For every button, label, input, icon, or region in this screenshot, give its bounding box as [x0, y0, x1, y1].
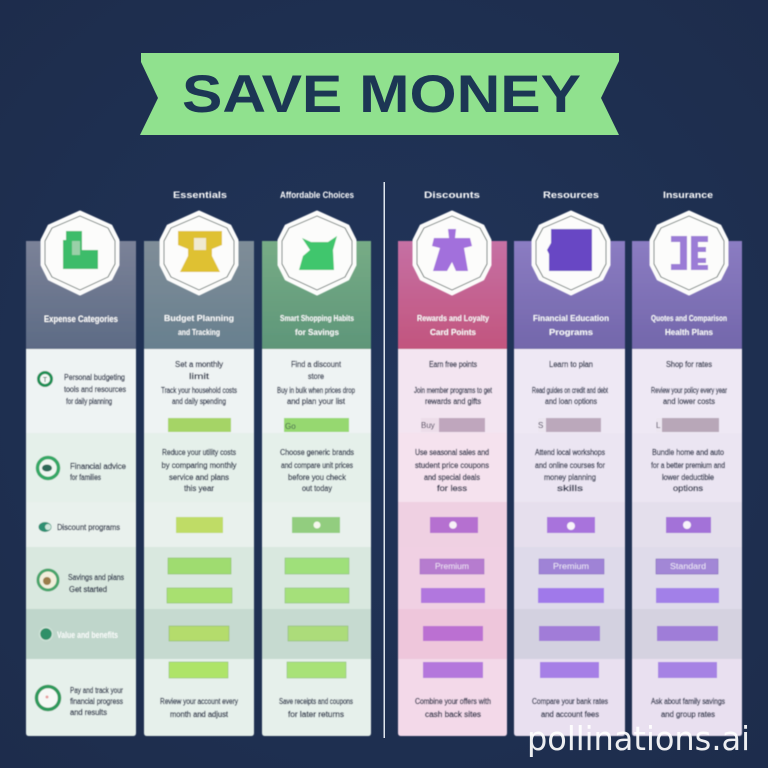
column 3 rows	[262, 349, 371, 736]
column 2 header label	[164, 314, 234, 337]
column 2 row 2 text: service and plans	[169, 473, 229, 482]
column 3 row 1 text: Buy in bulk when prices drop	[277, 386, 355, 395]
row label: housing	[64, 373, 126, 406]
column 3 title: Affordable Choices	[280, 190, 354, 200]
column 4 header label: Rewards and Loyalty	[417, 314, 489, 323]
title ribbon	[140, 53, 619, 135]
row label: goods: Get started	[69, 585, 107, 594]
column 2 header label: and Tracking	[178, 328, 220, 337]
column 5 row 2 text	[535, 448, 605, 493]
column 4 title: Discounts	[424, 190, 480, 200]
row icon: housing: T	[43, 377, 48, 384]
column 5 row 1 text: Read guides on credit and debt	[532, 386, 609, 395]
row label: goals: and results	[70, 708, 107, 717]
column 5 row 1 bar: S	[538, 421, 543, 430]
column 5 header	[514, 241, 625, 349]
column 6 row 6 text: Ask about family savings	[651, 697, 725, 706]
column 5 bars	[538, 517, 604, 678]
column 6 header label	[651, 314, 727, 337]
column 2 row 1 text: Set a monthly	[175, 360, 223, 369]
column 5 header label: Programs	[549, 328, 594, 337]
column 6 row 1 text	[651, 360, 727, 406]
column 4 row 1 bar: Buy	[421, 421, 435, 430]
column 5 rows	[514, 349, 625, 736]
column 6 row 1 text: Shop for rates	[666, 360, 712, 369]
column 3 row 2 text: out today	[302, 484, 332, 493]
column 4 row 2 text: Use seasonal sales and	[415, 448, 489, 457]
column 4 bars: Premium	[435, 562, 469, 571]
column 4 row 1 text: rewards and gifts	[425, 397, 481, 406]
column 6 header label: Quotes and Comparison	[651, 314, 727, 323]
row label: savings: for families	[70, 473, 101, 482]
column 6 bars	[656, 517, 719, 678]
column 4 row 1 bar	[421, 418, 485, 432]
column 5 row 6 text: and account fees	[541, 710, 599, 719]
column 6 header	[632, 241, 742, 349]
column 1 header	[26, 241, 136, 349]
column 4 row 1 text: Join member programs to get	[414, 386, 493, 395]
icon badge: column 6	[651, 212, 727, 294]
column 2 rows	[144, 349, 254, 736]
column 1 rows	[26, 349, 136, 736]
column 6 row 2 text: for a better premium and	[651, 461, 725, 470]
column 3 header label: Smart Shopping Habits	[280, 314, 354, 323]
central divider	[384, 182, 385, 738]
column 4 row 1 text	[414, 360, 493, 406]
column 3 row 2 text	[280, 448, 354, 493]
row label: savings	[70, 462, 127, 482]
column 5 row 2 text: Attend local workshops	[535, 448, 605, 457]
column 2 row 2 text: by comparing monthly	[162, 461, 236, 470]
column 3 header label: for Savings	[295, 328, 340, 337]
column 3 row 1 bar	[284, 418, 349, 432]
column 5 title: Resources	[543, 190, 599, 200]
column 4 header label: Card Points	[430, 328, 477, 337]
column 4 row 2 text: and special deals	[424, 473, 480, 482]
column 4 row 6 text: Combine your offers with	[415, 697, 491, 706]
column 2 row 2 text: Reduce your utility costs	[162, 448, 236, 457]
column 4 header label	[417, 314, 489, 337]
title: SAVE MONEY	[182, 65, 581, 124]
column 5 row 1 text: and loan options	[545, 397, 597, 406]
column 4 row 2 text: for less	[437, 484, 467, 493]
column 4 row 6 text: cash back sites	[425, 710, 481, 719]
icon badge: column 1	[42, 212, 118, 294]
column 2 row 2 text	[162, 448, 236, 493]
column 2 row 1 bar	[168, 418, 231, 432]
column 4 row 2 text	[415, 448, 489, 493]
column 5 row 6 text	[532, 697, 608, 719]
column 2 row 1 text: limit	[189, 372, 210, 381]
column 6: violet option	[632, 190, 742, 736]
row label: transfers: Value and benefits	[57, 630, 118, 640]
column 6 row 2 text: lower deductible	[662, 473, 714, 482]
column 3 row 1 text: Find a discount	[291, 360, 342, 369]
column 3 row 1 text	[277, 360, 355, 406]
column 3 row 1 text: store	[308, 372, 324, 381]
column 2: green option	[144, 190, 254, 736]
row label: housing: Personal budgeting	[64, 373, 125, 382]
column 2 row 2 text: this year	[184, 484, 214, 493]
column 3 row 2 text: before you check	[288, 473, 347, 482]
row icon: goods	[38, 570, 58, 590]
row label: housing: for daily planning	[66, 397, 112, 406]
column 2 row 1 text: and daily spending	[172, 397, 226, 406]
row label: goods: Savings and plans	[68, 573, 124, 582]
column 2 header label: Budget Planning	[164, 314, 234, 323]
column 6 row 2 text: Bundle home and auto	[652, 448, 724, 457]
row icon: savings	[38, 458, 58, 478]
column 3 row 1 text: and plan your list	[287, 397, 346, 406]
column 3 header label	[280, 314, 354, 337]
column 3 row 2 text: Choose generic brands	[280, 448, 354, 457]
column 6 row 6 text	[651, 697, 725, 719]
column 3 row 6 text: for later returns	[288, 710, 344, 719]
column 6 row 6 text: and group rates	[661, 710, 715, 719]
column 4 row 2 text: student price coupons	[415, 461, 489, 470]
column 2 row 1 text: Track your household costs	[161, 386, 237, 395]
row icon: cash	[38, 522, 52, 532]
column 1: category labels	[26, 241, 136, 736]
column 4 row 6 text	[415, 697, 491, 719]
column 4 row 1 text: Earn free points	[429, 360, 477, 369]
icon badge: column 4	[414, 212, 490, 294]
column 3 header	[262, 241, 371, 349]
column 6 bars: Standard	[670, 562, 706, 571]
column 6 rows	[632, 349, 742, 736]
column 5 row 1 text	[532, 360, 609, 406]
column 4 header	[398, 241, 507, 349]
column 2 bars	[167, 517, 232, 678]
column 3 row 6 text: Save receipts and coupons	[279, 697, 353, 706]
column 3 row 1 bar: Go	[285, 422, 296, 431]
column 5: violet option	[514, 190, 625, 736]
row label: goods	[68, 573, 124, 594]
column 6 row 2 text	[651, 448, 725, 493]
row icon: housing	[38, 372, 52, 386]
column 6 row 1 text: Review your policy every year	[651, 386, 727, 395]
column 3 row 6 text	[279, 697, 353, 719]
column 3 row 2 text: and compare unit prices	[281, 461, 353, 470]
column 4: pink option	[398, 190, 507, 736]
column 5 row 2 text: money planning	[544, 473, 596, 482]
row label: goals	[70, 686, 123, 717]
row label: savings: Financial advice	[70, 462, 127, 471]
column 6 row 1 bar	[656, 418, 719, 432]
column 5 row 2 text: and online courses for	[535, 461, 605, 470]
column 6 row 1 bar: L	[656, 421, 661, 430]
column 3: green option	[262, 190, 371, 736]
column 5 header label	[533, 314, 609, 337]
column 5 bars: Premium	[553, 562, 589, 571]
watermark: pollinations.ai	[527, 719, 750, 758]
column 2 row 6 text: Review your account every	[160, 697, 238, 706]
column 1 header label: Expense Categories	[44, 314, 118, 324]
row label: cash: Discount programs	[57, 523, 120, 532]
icon badge: column 2	[161, 212, 237, 294]
column 6 row 2 text: options	[673, 484, 703, 493]
column 6 header label: Health Plans	[665, 328, 714, 337]
column 2 header	[144, 241, 254, 349]
icon badge: column 3	[279, 212, 355, 294]
column 4 bars	[420, 517, 485, 678]
column 5 header label: Financial Education	[533, 314, 609, 323]
row icon: goals	[36, 686, 60, 710]
column 5 row 1 bar	[538, 418, 601, 432]
column 3 bars	[285, 517, 349, 678]
row label: housing: tools and resources	[64, 385, 126, 394]
row icon: transfers	[40, 628, 52, 640]
column 6 row 1 text: and lower costs	[663, 397, 715, 406]
row label: goals: Pay and track your	[70, 686, 123, 695]
column 2 title: Essentials	[173, 190, 227, 200]
column 2 row 6 text: month and adjust	[170, 710, 229, 719]
column 5 row 6 text: Compare your bank rates	[532, 697, 608, 706]
column 5 row 2 text: skills	[557, 484, 583, 493]
icon badge: column 5	[533, 212, 609, 294]
row label: goals: financial progress	[70, 697, 123, 706]
column 5 row 1 text: Learn to plan	[549, 360, 593, 369]
column 2 row 1 text	[161, 360, 237, 406]
column 6 title: Insurance	[663, 190, 713, 200]
column 2 row 6 text	[160, 697, 238, 719]
column 4 rows	[398, 349, 507, 736]
